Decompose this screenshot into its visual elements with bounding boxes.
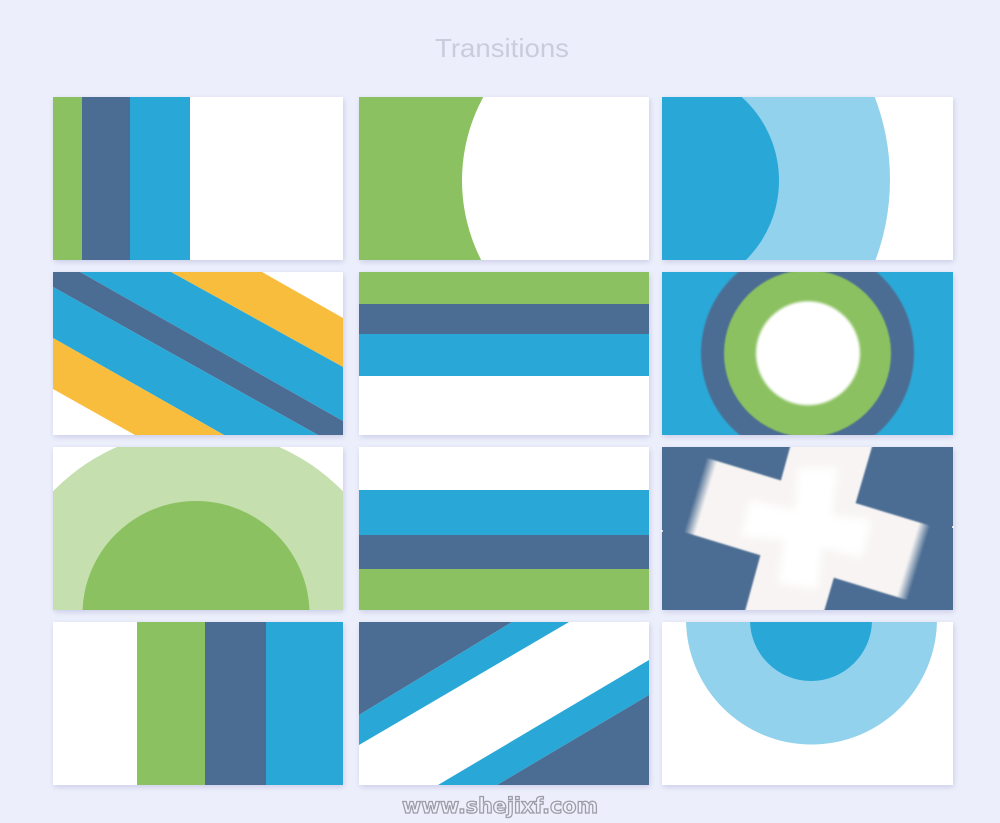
panel: rotated white cross: [661, 440, 954, 615]
panel: horizontal stripes top: [359, 272, 649, 435]
panel: blurred concentric rings: [661, 272, 956, 439]
panel: blue half circles top: [661, 622, 956, 789]
panel: vertical stripes right: [53, 622, 343, 785]
title: Transitions: [435, 33, 569, 63]
panel: vertical stripes left: [53, 97, 343, 260]
panel: horizontal stripes bottom: [359, 447, 649, 610]
panel: diagonal corners: [359, 622, 649, 785]
watermark: www.shejixf.com: [402, 794, 598, 818]
panel: green with white circle wipe: [358, 97, 652, 264]
panel: diagonal bands with yellow: [53, 272, 343, 435]
panel: green semicircles: [52, 447, 346, 614]
panel: blue concentric circles right: [661, 97, 956, 264]
